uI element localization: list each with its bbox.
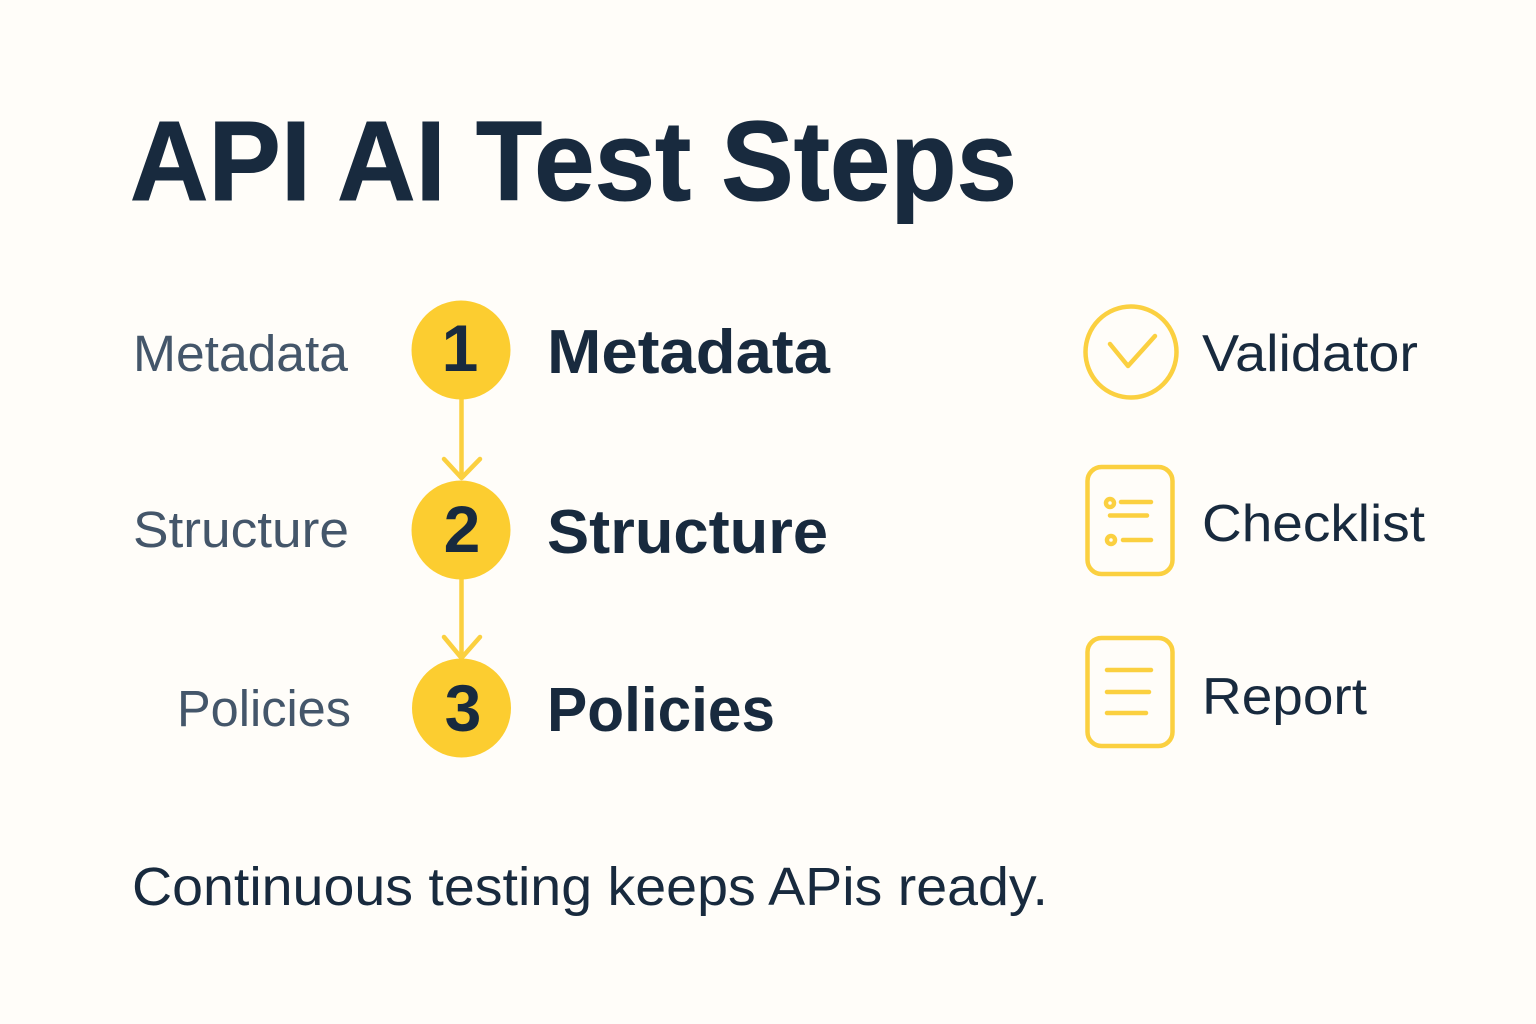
- arrow: step 2 to 3: [444, 578, 480, 658]
- step 3 badge: 3: [445, 671, 481, 745]
- icon: checklist: [1088, 467, 1172, 574]
- step 3 heading: Policies: [547, 676, 775, 745]
- step 3 badge: [412, 658, 511, 758]
- label: Checklist: Checklist: [1202, 495, 1426, 553]
- step 2 heading: Structure: [547, 498, 828, 567]
- step 1 badge: 1: [442, 311, 478, 385]
- left label: Metadata: Metadata: [133, 325, 349, 382]
- footer statement: Continuous testing keeps APis ready.: [132, 857, 1048, 917]
- icon: validator: [1086, 306, 1176, 398]
- step 1 badge: [412, 300, 510, 400]
- step 2 badge: [412, 480, 510, 580]
- label: Report: Report: [1202, 668, 1368, 726]
- step 2 badge: 2: [444, 492, 480, 566]
- arrow: step 1 to 2: [444, 398, 480, 478]
- icon: report: [1088, 638, 1172, 746]
- left label: Structure: Structure: [133, 501, 349, 558]
- step 1 heading: Metadata: [547, 318, 831, 387]
- left label: Policies: Policies: [177, 680, 351, 737]
- label: Validator: Validator: [1202, 325, 1418, 383]
- title: API AI Test Steps: [130, 98, 1017, 224]
